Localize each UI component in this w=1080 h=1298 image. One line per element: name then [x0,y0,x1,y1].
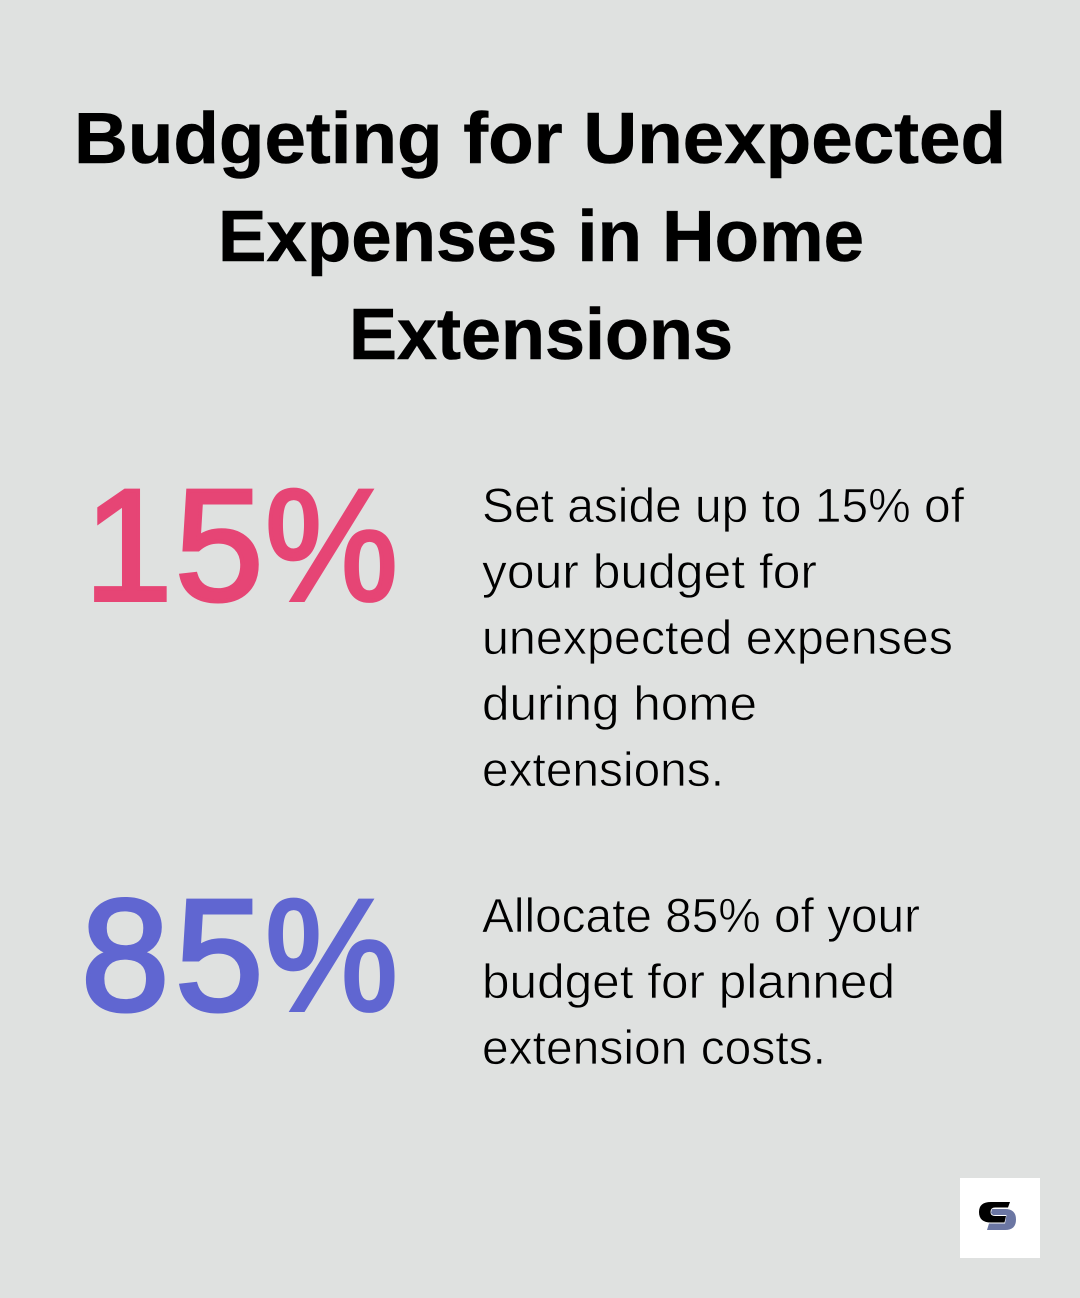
text block: 85% description: budget for planned [482,956,895,1009]
text block: 15% description: extensions. [482,744,724,797]
title: Expenses in Home [218,197,864,277]
text block: 15% description: during home [482,678,757,731]
stat: 85%: 8 [81,866,169,1044]
stat: 15%: 5 [175,456,263,634]
title [74,99,1006,375]
text block: 85% description: Allocate 85% of your [482,890,920,943]
text block: 85% description [482,890,920,1075]
stat: 15%: 1 [84,456,172,634]
stat: 85% [81,866,398,1044]
logo [960,1178,1040,1258]
stat: 85%: % [265,866,398,1044]
text block: 15% description: Set aside up to 15% of [482,480,965,533]
text block: 15% description [482,480,965,797]
stat: 15% [84,456,398,634]
stat: 85%: 5 [175,866,263,1044]
text block: 15% description: your budget for [482,546,817,599]
text block: 85% description: extension costs. [482,1022,826,1075]
title: Budgeting for Unexpected [74,99,1006,179]
title: Extensions [349,295,733,375]
text block: 15% description: unexpected expenses [482,612,953,665]
stat: 15%: % [265,456,398,634]
